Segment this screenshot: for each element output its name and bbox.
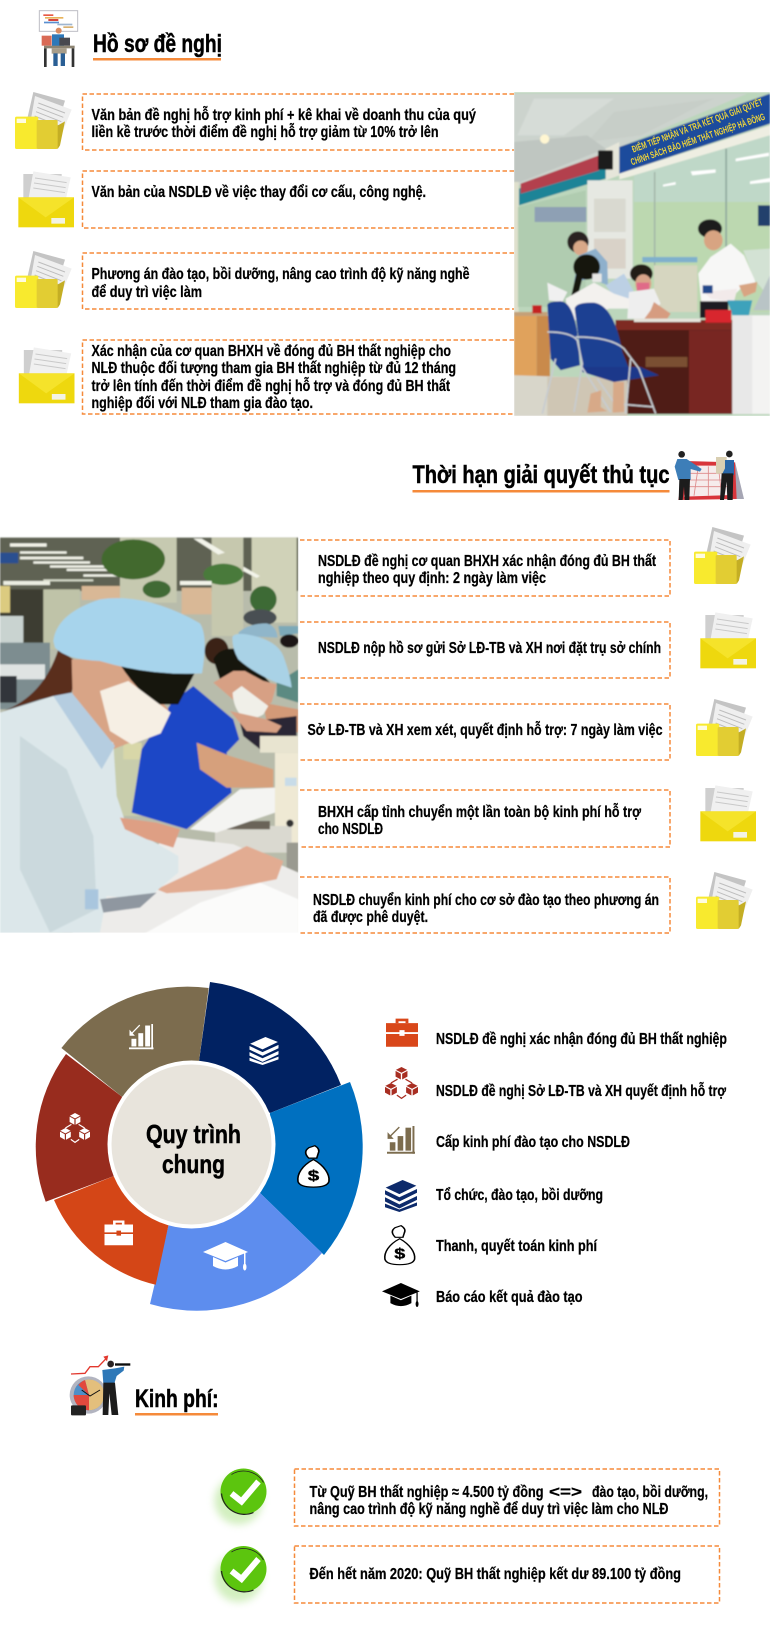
row: chuyển cho cơ sở đào tạo <box>300 872 753 933</box>
row: xác nhận đóng BH <box>300 527 751 596</box>
chart: Quy trình chung donut <box>36 982 363 1311</box>
icon: white briefcase <box>104 1221 133 1245</box>
photo: insurance office counter <box>514 92 770 416</box>
icon: folder <box>696 872 753 929</box>
icon: folder <box>694 527 751 584</box>
row: xác nhận đóng BH: NSDLĐ đề nghị cơ quan BHXH xác nhận đóng đủ BH thất <box>318 553 656 570</box>
icon: briefcase <box>386 1019 418 1047</box>
row: từ Quỹ BH thất nghiệp: đào tạo, bồi dưỡng, <box>592 1484 708 1501</box>
row: văn bản đề nghị: Văn bản đề nghị hỗ trợ kinh phí + kê khai về doanh thu của quý <box>92 107 476 124</box>
row: chuyển kinh phí: cho NSDLĐ <box>318 821 383 838</box>
chairs <box>547 301 580 370</box>
icon: folder <box>15 92 72 149</box>
row: phương án đào tạo: Phương án đào tạo, bồi dưỡng, nâng cao trình độ kỹ năng nghề <box>92 266 470 283</box>
row: nộp hồ sơ: NSDLĐ nộp hồ sơ gửi Sở LĐ-TB và XH nơi đặt trụ sở chính <box>318 640 661 657</box>
row: xác nhận của cơ quan BHXH: trở lên tính đến thời điểm đề nghị hỗ trợ và đóng đủ BH thất <box>92 378 450 395</box>
row: từ Quỹ BH thất nghiệp: nâng cao trình độ kỹ năng nghề để duy trì việc làm cho NLĐ <box>310 1501 668 1518</box>
icon: white chart <box>129 1024 154 1049</box>
heading: Hồ sơ đề nghị: Hồ sơ đề nghị <box>93 30 222 58</box>
woman in white <box>573 254 600 280</box>
legend: process steps <box>382 1019 727 1307</box>
row: từ Quỹ BH thất nghiệp <box>214 1468 720 1526</box>
photo: garment workers sewing <box>0 538 299 934</box>
icon: money bag: $ <box>394 1245 406 1262</box>
icon: green check <box>214 1468 266 1524</box>
legend item 5: Thanh, quyết toán kinh phí <box>436 1238 598 1255</box>
icon: green check <box>214 1546 266 1602</box>
row: chuyển kinh phí: BHXH cấp tỉnh chuyển một lần toàn bộ kinh phí hỗ trợ <box>318 804 642 821</box>
icon: money bag: $ <box>308 1167 319 1184</box>
man right <box>698 219 722 238</box>
row: đến hết năm 2020: Đến hết năm 2020: Quỹ BH thất nghiệp kết dư 89.100 tỷ đồng <box>310 1566 681 1583</box>
icon: envelope <box>19 347 74 403</box>
heading: Kinh phí: Kinh phí: <box>135 1385 218 1413</box>
icon: two men with calendar <box>675 451 744 500</box>
row: xác nhận của cơ quan BHXH: NLĐ thuộc đối tượng tham gia BH thất nghiệp từ đủ 12 tháng <box>92 360 456 377</box>
row: xác nhận đóng BH: nghiệp theo quy định: 2 ngày làm việc <box>318 570 546 587</box>
segment: light blue <box>150 1193 322 1311</box>
heading: Thời hạn giải quyết thủ tục: Thời hạn giải quyết thủ tục <box>412 461 670 489</box>
centre circle: Quy trình <box>146 1119 241 1149</box>
icon: envelope <box>700 612 756 668</box>
section: Thời hạn giải quyết thủ tục <box>0 451 756 934</box>
icon: white graduation cap <box>203 1242 248 1270</box>
row: văn bản thay đổi cơ cấu: Văn bản của NSDLĐ về việc thay đổi cơ cấu, công nghệ. <box>92 184 426 201</box>
icon: office worker with gantt chart <box>39 11 78 67</box>
section: Hồ sơ đề nghị <box>15 11 770 416</box>
icon: money bag <box>385 1226 415 1265</box>
row: xem xét quyết định <box>300 699 753 760</box>
back worker <box>238 623 278 638</box>
section: Kinh phí <box>70 1355 720 1603</box>
icon: money bag <box>298 1146 329 1187</box>
desk and furniture <box>616 320 732 414</box>
row: từ Quỹ BH thất nghiệp: Từ Quỹ BH thất nghiệp ≈ 4.500 tỷ đồng <box>310 1484 544 1501</box>
segment: orange <box>54 1176 168 1285</box>
row: từ Quỹ BH thất nghiệp: <=> <box>549 1484 582 1501</box>
legend item 4: Tổ chức, đào tạo, bồi dưỡng <box>436 1187 603 1204</box>
icon: chart <box>387 1126 415 1154</box>
legend item 3: Cấp kinh phí đào tạo cho NSDLĐ <box>436 1134 630 1151</box>
row: phương án đào tạo: để duy trì việc làm <box>92 284 202 301</box>
row: xác nhận của cơ quan BHXH: Xác nhận của cơ quan BHXH về đóng đủ BH thất nghiệp cho <box>92 343 451 360</box>
woman centre <box>630 264 653 283</box>
row: nộp hồ sơ <box>300 612 756 678</box>
second woman <box>205 638 229 664</box>
icon: envelope <box>700 785 756 841</box>
row: chuyển cho cơ sở đào tạo: đã được phê duyệt. <box>313 909 428 926</box>
row: chuyển kinh phí <box>300 785 756 847</box>
icon: white cubes <box>60 1113 90 1142</box>
icon: cubes <box>385 1067 418 1098</box>
centre circle: chung <box>162 1149 225 1179</box>
forearm and hand <box>157 846 283 893</box>
icon: books <box>385 1180 417 1212</box>
icon: graduation cap <box>382 1283 420 1307</box>
row: văn bản thay đổi cơ cấu <box>18 171 514 228</box>
row: chuyển cho cơ sở đào tạo: NSDLĐ chuyển kinh phí cho cơ sở đào tạo theo phương án <box>313 892 659 909</box>
row: văn bản đề nghị <box>15 92 514 150</box>
centre circle <box>108 1060 276 1228</box>
sewing machine <box>275 753 298 843</box>
icon: envelope <box>18 171 74 227</box>
man left <box>567 231 589 253</box>
segment: navy <box>199 982 341 1113</box>
icon: businessman with telescope and clock <box>70 1355 130 1415</box>
big woman <box>5 650 74 710</box>
segment: dark red <box>36 1054 122 1202</box>
icon: folder <box>696 699 753 756</box>
bottom fabric <box>72 836 298 934</box>
row: đến hết năm 2020 <box>214 1546 720 1603</box>
row: văn bản đề nghị: liền kề trước thời điểm đề nghị hỗ trợ giảm từ 10% trở lên <box>92 124 438 141</box>
segment: blue <box>260 1082 363 1255</box>
row: xác nhận của cơ quan BHXH <box>19 340 514 414</box>
segment: brown <box>61 987 209 1097</box>
row: xem xét quyết định: Sở LĐ-TB và XH xem xét, quyết định hỗ trợ: 7 ngày làm việc <box>308 722 663 739</box>
icon: folder <box>15 251 72 308</box>
legend item 6: Báo cáo kết quả đào tạo <box>436 1289 582 1306</box>
icon: white books <box>250 1037 278 1065</box>
row: phương án đào tạo <box>15 251 514 309</box>
row: xác nhận của cơ quan BHXH: nghiệp đối với NLĐ tham gia đào tạo. <box>92 395 313 412</box>
